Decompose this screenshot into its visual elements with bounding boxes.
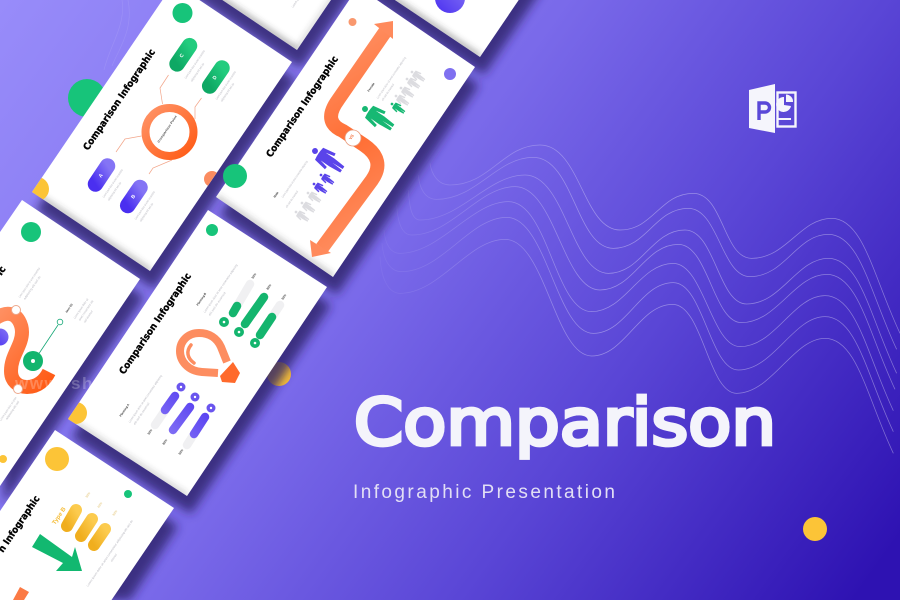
green bars: [233, 284, 280, 335]
planning labels and captions: Lorem ipsum dolor sit amet consectetur adipiscing: [203, 263, 239, 314]
labels: elit sed do eiusmod: [285, 190, 299, 209]
purple dot: [444, 68, 456, 80]
purple bar values: 80%: [162, 438, 168, 446]
decorative wave lines: [380, 145, 900, 453]
slide title: Comparison Infographic: [264, 54, 341, 160]
pill B: B: [130, 193, 137, 200]
pill C: C: [179, 52, 186, 59]
people icons: green side grey: [392, 68, 427, 108]
planning labels and captions: elit sed do eiusmod: [208, 291, 227, 317]
purple bar values: 50%: [178, 448, 184, 456]
green dot: [206, 224, 218, 236]
purple badge dots: [180, 386, 212, 409]
caption text: Lorem ipsum dolor sit amet consectetur: [134, 190, 156, 221]
slide shadows: [0, 0, 626, 600]
caption text: Lorem ipsum dolor sit amet consectetur: [184, 49, 206, 80]
slide: S curve comparison: [0, 200, 140, 486]
green bar values: 30%: [251, 272, 257, 280]
green bar badges: [219, 317, 260, 348]
caption text: Lorem ipsum dolor sit amet consectetur: [215, 70, 237, 101]
caption: Lorem ipsum dolor sit amet consectetur adipiscing elit sed do: [86, 519, 134, 588]
VS badge: VS: [348, 133, 355, 141]
green arrow: [32, 534, 82, 571]
item text: adipiscing elit sed do: [23, 275, 42, 301]
slide title: Comparison Infographic: [117, 271, 194, 377]
slide: type arrow comparison: [0, 430, 174, 600]
people icons: purple: [307, 141, 348, 196]
labels: Lorem ipsum dolor sit amet consectetur adipiscing: [376, 56, 407, 100]
decorative circle: big green behind slide: [68, 79, 106, 117]
item text: amet consectetur elit: [78, 299, 94, 322]
planning labels and captions: [119, 263, 239, 426]
pill values: [85, 491, 118, 517]
planning labels and captions: Planning A: [119, 402, 131, 418]
people icons: green: [357, 99, 407, 135]
purple bar values: 30%: [147, 428, 153, 436]
pill B: [128, 188, 140, 206]
pill A: [96, 166, 108, 184]
green item with connector: [23, 319, 63, 371]
item text: [0, 267, 94, 422]
green badge dots: [223, 321, 256, 344]
purple circle: [435, 0, 465, 13]
planning labels and captions: Lorem ipsum dolor sit amet consectetur adipiscing: [128, 374, 163, 424]
purple bar values: [147, 428, 184, 456]
pill values: 30%: [85, 491, 91, 499]
connectors: [116, 75, 202, 174]
caption text: [102, 49, 237, 223]
slide: top middle partial: [222, 0, 331, 50]
labels: Lorem ipsum dolor sit amet consectetur adipiscing: [281, 160, 309, 199]
slide: light bulb comparison: [65, 210, 327, 496]
clipped yellow corner circle: [32, 178, 49, 200]
purple circle: [0, 328, 8, 346]
S arrow: [310, 21, 393, 257]
VS badge: [345, 130, 361, 146]
bulb icon: [180, 333, 240, 383]
caption text: adipiscing elit sed do: [139, 202, 154, 223]
green dot: [124, 490, 132, 498]
green dot: [172, 3, 192, 23]
planning labels and captions: Planning B: [196, 291, 208, 307]
labels: [273, 56, 407, 209]
slide: arrow comparison: [216, 0, 475, 277]
purple bar badges: [176, 382, 216, 412]
yellow circle: [45, 447, 69, 471]
pill A: A: [98, 172, 105, 179]
green dot on edge: [223, 164, 247, 188]
clipped yellow circle: [68, 402, 87, 424]
icon: PowerPoint logo: [749, 84, 796, 133]
caption text: Lorem ipsum dolor sit amet consectetur: [102, 168, 124, 199]
yellow dot: [803, 517, 827, 541]
pill C: [177, 46, 190, 64]
caption text: adipiscing elit sed do: [220, 82, 235, 103]
item text: Lorem ipsum dolor sit amet consectetur: [18, 267, 41, 299]
green bar values: 80%: [266, 283, 272, 291]
caption text: adipiscing elit sed do: [190, 62, 205, 83]
caption: eiusmod: [110, 553, 118, 563]
ring label: Comparison Point: [157, 114, 178, 144]
item text: adipiscing elit sed: [5, 400, 20, 421]
badges: [12, 306, 22, 394]
clipped yellow dot: [0, 455, 7, 463]
pill D: [210, 68, 222, 86]
labels: elit sed do eiusmod: [381, 83, 395, 102]
S curve: [0, 314, 49, 387]
people icons: purple side grey: [292, 189, 323, 224]
green dot: [21, 222, 41, 242]
slide: circle comparison: [25, 0, 292, 271]
green bar values: [251, 272, 287, 301]
orange pill partial: [13, 587, 29, 600]
purple bars: [155, 396, 205, 445]
slide title: Comparison Infographic: [81, 47, 158, 153]
ring: [146, 108, 194, 156]
caption text: adipiscing elit sed do: [107, 181, 122, 202]
item text: Lorem ipsum dolor sit: [73, 297, 89, 320]
planning labels and captions: elit sed do eiusmod: [133, 402, 151, 426]
yellow pills: [67, 510, 105, 545]
green bar values: 50%: [281, 293, 287, 301]
item text: sed eiusmod: [83, 310, 94, 324]
faint wave lines at top-left: [104, 0, 129, 70]
orange dot: [348, 18, 356, 26]
item text: Item 03: [65, 302, 74, 314]
labels: Male: [273, 191, 280, 199]
type label: Type B: [52, 506, 68, 526]
watermark: www. shu: [14, 374, 106, 393]
title: Comparison: [354, 386, 776, 460]
decorative circle: yellow behind bulb slide: [267, 362, 291, 386]
subtitle: Infographic Presentation: [353, 482, 615, 503]
pill values: 60%: [97, 501, 103, 509]
clipped orange circle: [204, 171, 217, 186]
slide: top right partial: [395, 0, 519, 57]
pill values: 90%: [112, 509, 118, 517]
labels: Female: [367, 81, 376, 93]
pill D: D: [212, 74, 219, 81]
